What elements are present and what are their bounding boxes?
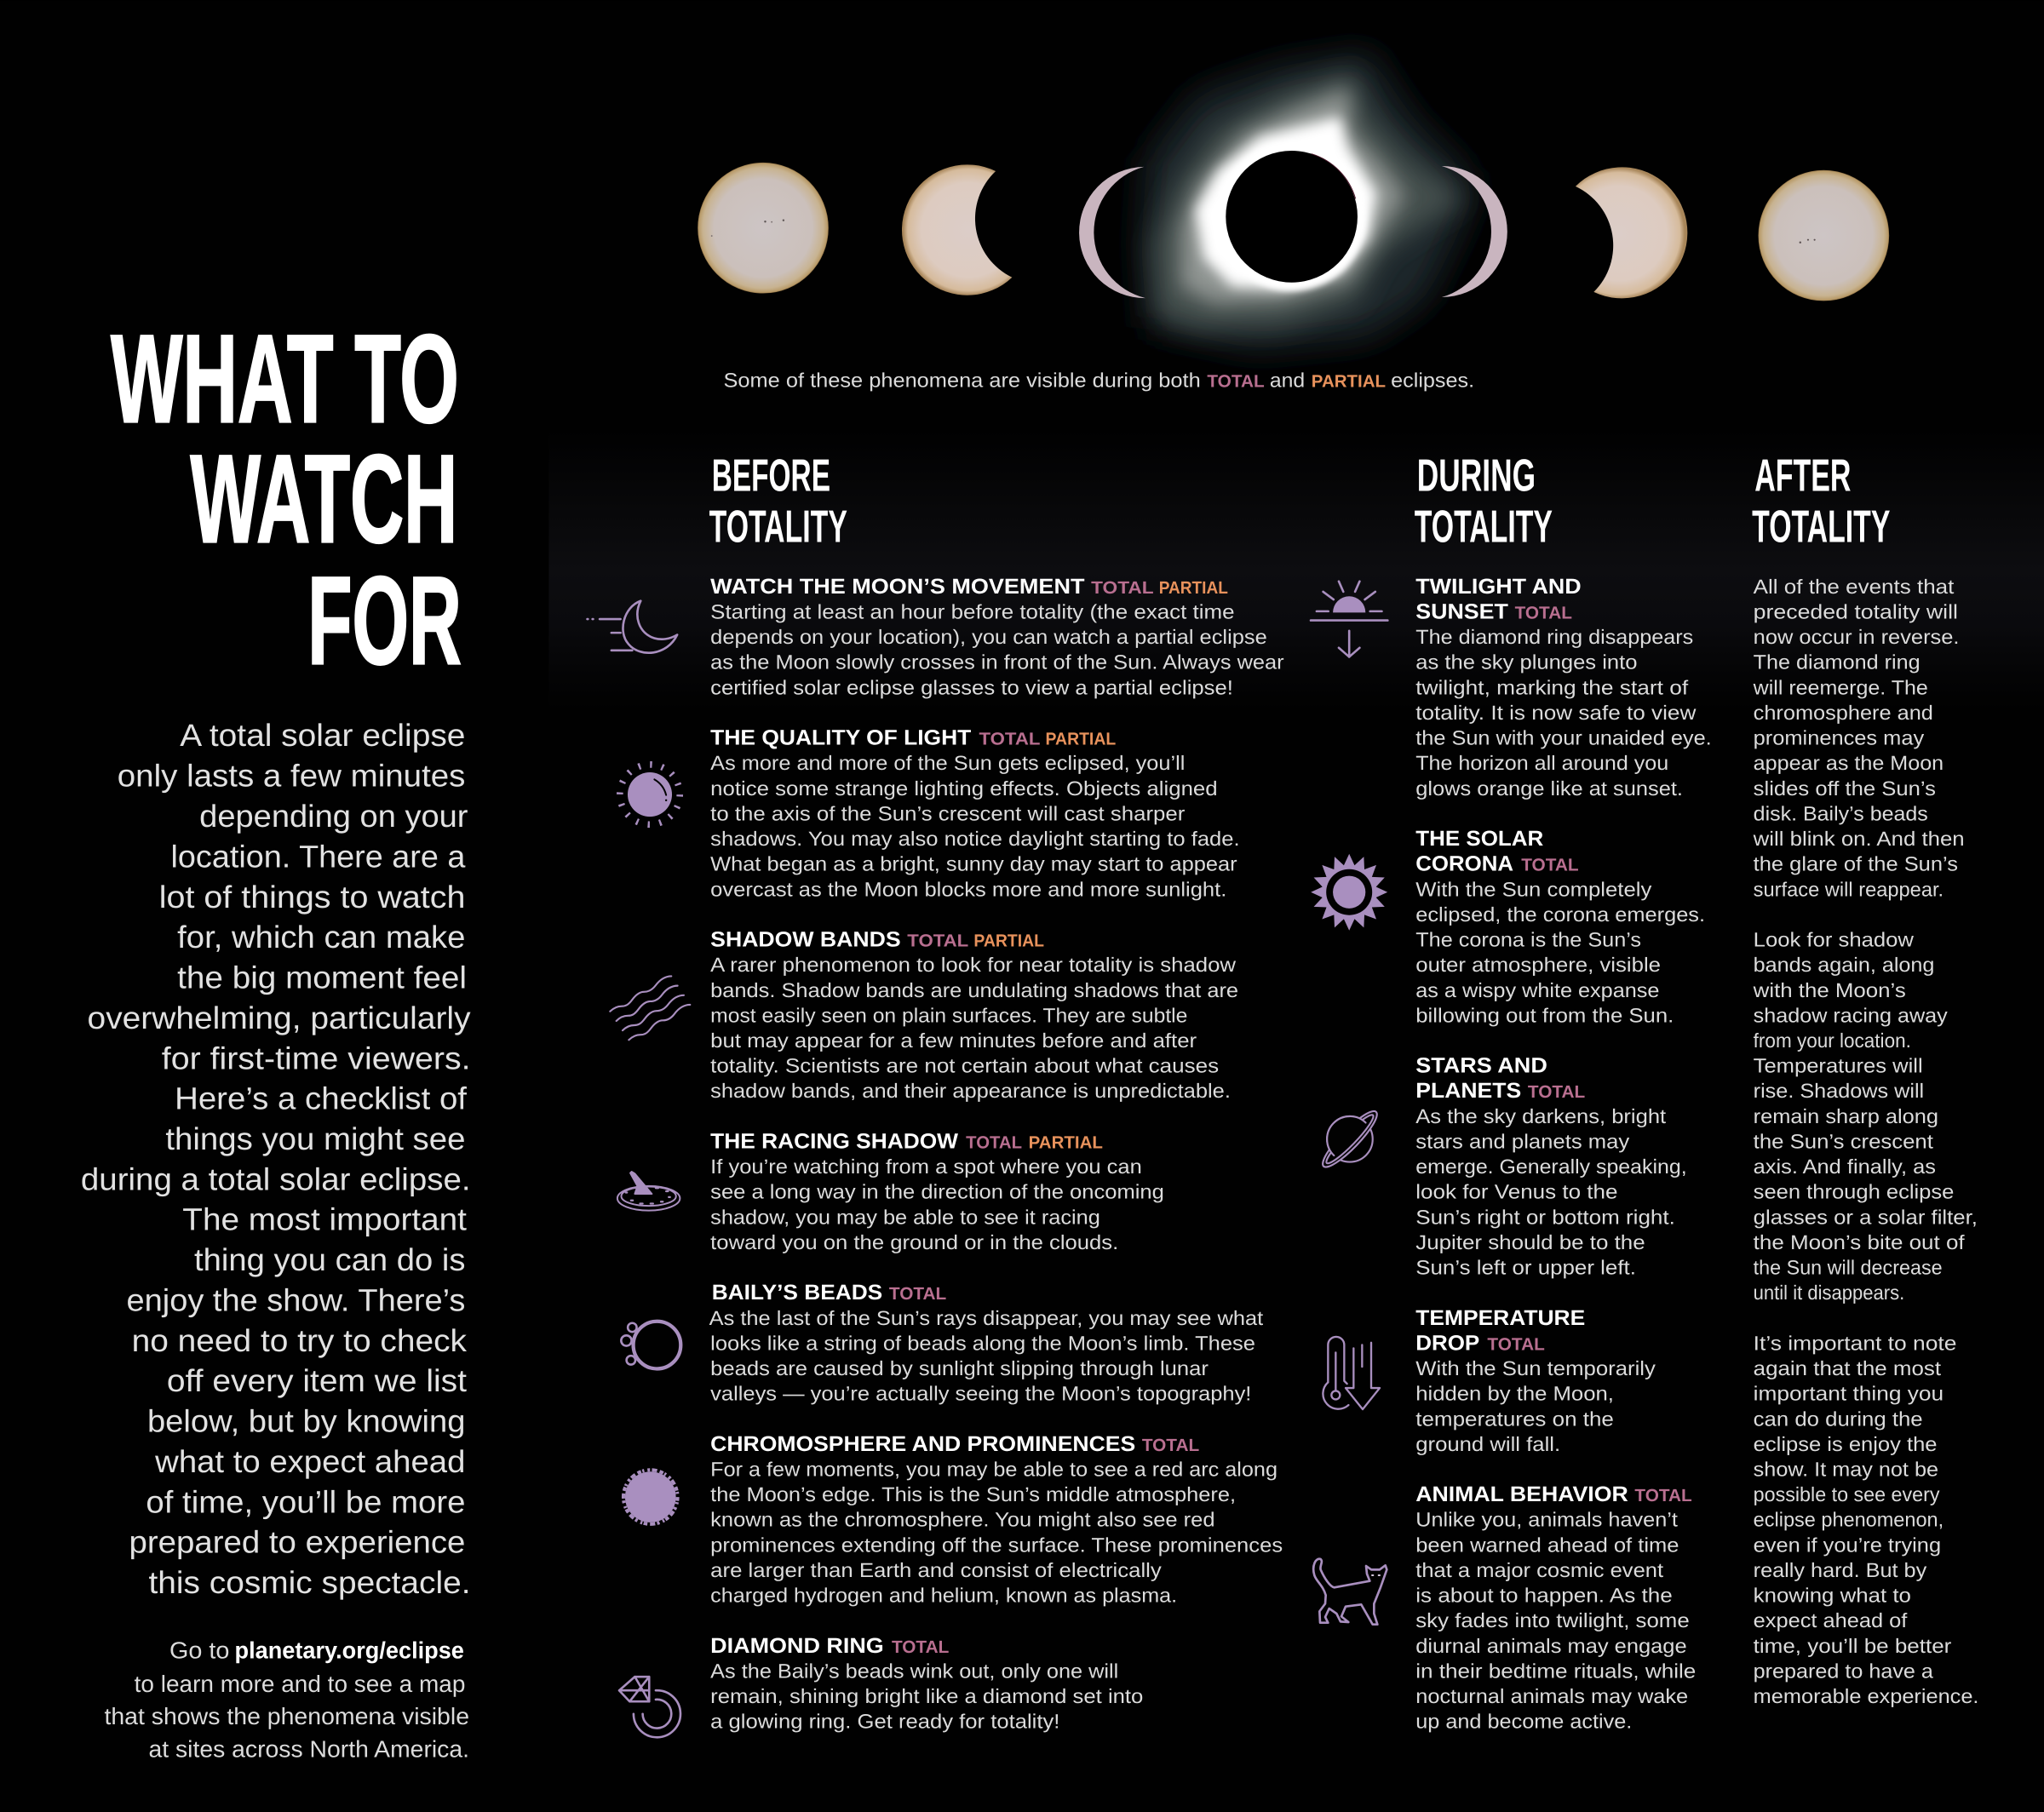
- item: stars and planets: TOTAL: [1528, 1082, 1585, 1102]
- item: animal behavior: TOTAL: [1634, 1486, 1692, 1505]
- item: baily's beads: TOTAL: [889, 1284, 946, 1304]
- item: animal behavior: that a major cosmic event: [1415, 1560, 1664, 1582]
- item: moon movement: TOTAL: [1091, 578, 1154, 597]
- item: animal behavior: [1313, 1483, 1696, 1734]
- intro caption: [723, 370, 1474, 393]
- call to action: planetary.org/eclipse: [235, 1637, 464, 1664]
- item: temperature drop: [1323, 1306, 1656, 1456]
- item: temperature drop: TEMPERATURE: [1415, 1306, 1585, 1330]
- heading: during totality: DURING: [1417, 450, 1536, 502]
- intro paragraph: lot of things to watch: [159, 880, 465, 915]
- item: solar corona: [1311, 828, 1705, 1028]
- intro paragraph: The most important: [182, 1203, 467, 1238]
- intro paragraph: location. There are a: [171, 840, 466, 875]
- item: baily's beads: valleys — you’re actually seeing the Moon’s topography!: [710, 1384, 1251, 1406]
- text: reverse events: now occur in reverse.: [1754, 627, 1960, 649]
- item: baily's beads: BAILY’S BEADS: [712, 1282, 882, 1305]
- intro paragraph: below, but by knowing: [147, 1405, 465, 1440]
- intro paragraph: thing you can do is: [194, 1243, 465, 1278]
- text: closing note: It’s important to note: [1754, 1333, 1956, 1356]
- item: quality of light: As more and more of the Sun gets eclipsed, you’ll: [710, 753, 1185, 775]
- text: shadow bands again: the Sun will decrease: [1754, 1258, 1943, 1280]
- item: twilight and sunset: twilight, marking the start of: [1415, 677, 1689, 699]
- intro paragraph: depending on your: [199, 800, 468, 834]
- text: reverse events: preceded totality will: [1754, 602, 1958, 624]
- item: twilight and sunset: The horizon all around you: [1415, 753, 1668, 775]
- item: quality of light: What began as a bright, sunny day may start to appear: [710, 854, 1237, 876]
- item: temperature drop: TOTAL: [1487, 1334, 1545, 1354]
- intro paragraph: [81, 719, 471, 1601]
- item: stars and planets: Sun’s right or bottom right.: [1415, 1207, 1675, 1229]
- item: baily's beads: As the last of the Sun’s rays disappear, you may see what: [709, 1308, 1264, 1330]
- item: twilight and sunset: SUNSET: [1415, 600, 1508, 624]
- item: racing shadow: shadow, you may be able to see it racing: [710, 1207, 1100, 1229]
- intro caption: TOTAL: [1207, 371, 1265, 391]
- sun: thin crescent right: [1442, 166, 1507, 297]
- intro caption: PARTIAL: [1312, 371, 1386, 391]
- item: moon movement: [588, 575, 1284, 699]
- item: solar corona: CORONA: [1415, 852, 1513, 876]
- item: chromosphere: are larger than Earth and consist of electrically: [710, 1560, 1162, 1582]
- item: chromosphere: the Moon’s edge. This is the Sun’s middle atmosphere,: [710, 1484, 1236, 1506]
- intro paragraph: off every item we list: [167, 1364, 467, 1399]
- icon: chromosphere: [623, 1470, 678, 1524]
- item: animal behavior: sky fades into twilight, some: [1415, 1610, 1690, 1632]
- heading: during totality: TOTALITY: [1415, 502, 1553, 553]
- text: reverse events: The diamond ring: [1754, 652, 1921, 674]
- item: moon movement: depends on your location), you can watch a partial eclipse: [710, 627, 1267, 649]
- intro paragraph: the big moment feel: [177, 960, 467, 996]
- text: reverse events: slides off the Sun’s: [1754, 778, 1936, 800]
- text: reverse events: appear as the Moon: [1754, 753, 1944, 775]
- text: reverse events: will reemerge. The: [1752, 677, 1928, 699]
- item: chromosphere: For a few moments, you may be able to see a red arc along: [710, 1459, 1278, 1482]
- text: shadow bands again: remain sharp along: [1754, 1106, 1938, 1128]
- item: shadow bands: most easily seen on plain surfaces. They are subtle: [710, 1006, 1187, 1028]
- title: [111, 310, 462, 691]
- item: stars and planets: look for Venus to the: [1415, 1182, 1617, 1204]
- item: stars and planets: STARS AND: [1415, 1054, 1547, 1078]
- icon: sunset: [1311, 582, 1387, 657]
- intro paragraph: overwhelming, particularly: [88, 1001, 471, 1036]
- text: closing note: knowing what to: [1754, 1586, 1911, 1608]
- text: shadow bands again: shadow racing away: [1754, 1006, 1948, 1028]
- item: twilight and sunset: [1311, 575, 1712, 800]
- eclipse sequence: [698, 51, 1889, 349]
- item: twilight and sunset: glows orange like at sunset.: [1415, 778, 1683, 800]
- item: diamond ring: TOTAL: [892, 1637, 949, 1656]
- item: stars and planets: PLANETS: [1415, 1080, 1521, 1103]
- item: shadow bands: SHADOW BANDS: [710, 928, 901, 952]
- text: closing note: really hard. But by: [1754, 1560, 1927, 1582]
- item: shadow bands: [610, 928, 1238, 1103]
- intro paragraph: what to expect ahead: [154, 1445, 465, 1480]
- text: shadow bands again: from your location.: [1754, 1030, 1911, 1052]
- item: stars and planets: Jupiter should be to the: [1415, 1232, 1645, 1254]
- intro paragraph: prepared to experience: [129, 1526, 465, 1561]
- intro paragraph: for first-time viewers.: [162, 1041, 471, 1076]
- text: reverse events: will blink on. And then: [1752, 829, 1965, 851]
- text: shadow bands again: axis. And finally, as: [1754, 1156, 1936, 1178]
- item: shadow bands: but may appear for a few minutes before and after: [710, 1030, 1197, 1052]
- item: moon movement: Starting at least an hour before totality (the exact time: [710, 602, 1234, 624]
- text: closing note: possible to see every: [1754, 1484, 1940, 1506]
- intro paragraph: only lasts a few minutes: [118, 759, 465, 794]
- item: racing shadow: PARTIAL: [1029, 1132, 1103, 1152]
- item: racing shadow: If you’re watching from a spot where you can: [710, 1156, 1142, 1178]
- item: solar corona: With the Sun completely: [1415, 879, 1652, 901]
- sun: thin crescent left: [1079, 167, 1145, 298]
- icon: beads ring: [621, 1322, 680, 1368]
- item: baily's beads: beads are caused by sunlight slipping through lunar: [710, 1358, 1209, 1380]
- text: shadow bands again: [1752, 930, 1978, 1305]
- item: animal behavior: been warned ahead of time: [1415, 1534, 1679, 1557]
- item: animal behavior: up and become active.: [1415, 1712, 1632, 1734]
- item: temperature drop: With the Sun temporarily: [1415, 1358, 1656, 1380]
- item: solar corona: outer atmosphere, visible: [1415, 955, 1661, 977]
- title: FOR: [307, 552, 462, 691]
- text: shadow bands again: with the Moon’s: [1752, 980, 1906, 1002]
- text: closing note: expect ahead of: [1754, 1610, 1908, 1632]
- item: diamond ring: DIAMOND RING: [710, 1634, 884, 1658]
- item: moon movement: WATCH THE MOON’S MOVEMENT: [710, 575, 1084, 599]
- column: before totality: [588, 450, 1284, 1737]
- text: reverse events: the glare of the Sun’s: [1754, 854, 1958, 876]
- item: racing shadow: toward you on the ground or in the clouds.: [710, 1232, 1118, 1254]
- item: quality of light: PARTIAL: [1046, 729, 1116, 748]
- heading: after totality: [1752, 450, 1890, 553]
- text: shadow bands again: rise. Shadows will: [1754, 1081, 1924, 1103]
- column: after totality: [1752, 450, 1978, 1708]
- item: twilight and sunset: The diamond ring disappears: [1415, 627, 1694, 649]
- item: baily's beads: looks like a string of beads along the Moon’s limb. These: [710, 1333, 1255, 1356]
- item: solar corona: The corona is the Sun’s: [1415, 930, 1642, 952]
- text: closing note: [1754, 1333, 1978, 1708]
- call to action: at sites across North America.: [148, 1736, 469, 1762]
- item: stars and planets: emerge. Generally speaking,: [1415, 1156, 1687, 1178]
- item: shadow bands: PARTIAL: [973, 931, 1044, 950]
- item: chromosphere: known as the chromosphere. You might also see red: [710, 1510, 1215, 1532]
- item: chromosphere: [623, 1432, 1283, 1608]
- text: shadow bands again: the Moon’s bite out of: [1754, 1232, 1966, 1254]
- item: stars and planets: stars and planets may: [1415, 1132, 1630, 1154]
- sun: partial crescent left: [902, 164, 1012, 295]
- icon: moon: [588, 601, 677, 653]
- sun: uneclipsed before: [698, 163, 829, 294]
- text: reverse events: disk. Baily’s beads: [1754, 804, 1928, 826]
- item: twilight and sunset: totality. It is now safe to view: [1415, 702, 1697, 725]
- intro caption: Some of these phenomena are visible during both: [723, 370, 1201, 393]
- item: animal behavior: diurnal animals may engage: [1415, 1636, 1687, 1658]
- item: moon movement: as the Moon slowly crosses in front of the Sun. Always wear: [710, 652, 1284, 674]
- item: quality of light: overcast as the Moon blocks more and more sunlight.: [710, 879, 1226, 901]
- item: animal behavior: nocturnal animals may wake: [1415, 1686, 1688, 1708]
- icon: sun: [620, 765, 680, 824]
- text: reverse events: prominences may: [1754, 728, 1925, 750]
- item: diamond ring: As the Baily’s beads wink out, only one will: [710, 1661, 1118, 1683]
- intro paragraph: things you might see: [165, 1122, 465, 1157]
- text: reverse events: surface will reappear.: [1754, 879, 1944, 901]
- item: chromosphere: prominences extending off the surface. These prominences: [710, 1534, 1283, 1557]
- corona: [1141, 51, 1473, 349]
- title: WHAT TO: [111, 310, 459, 450]
- icon: corona star: [1311, 854, 1387, 931]
- intro paragraph: A total solar eclipse: [180, 719, 465, 754]
- item: diamond ring: a glowing ring. Get ready for totality!: [710, 1712, 1059, 1734]
- item: twilight and sunset: as the sky plunges into: [1415, 652, 1637, 674]
- text: reverse events: All of the events that: [1754, 576, 1955, 599]
- item: moon movement: certified solar eclipse glasses to view a partial eclipse!: [710, 677, 1233, 699]
- intro paragraph: Here’s a checklist of: [175, 1082, 467, 1117]
- text: closing note: even if you’re trying: [1754, 1534, 1941, 1557]
- item: quality of light: [620, 726, 1240, 901]
- text: shadow bands again: seen through eclipse: [1754, 1182, 1954, 1204]
- item: shadow bands: TOTAL: [907, 931, 968, 950]
- text: closing note: eclipse is enjoy the: [1754, 1434, 1937, 1456]
- intro paragraph: enjoy the show. There’s: [126, 1283, 465, 1319]
- icon: thermometer: [1323, 1337, 1380, 1409]
- icon: diamond ring: [619, 1677, 680, 1737]
- icon: sundial: [617, 1172, 680, 1211]
- call to action: Go to: [169, 1637, 229, 1664]
- item: chromosphere: charged hydrogen and helium, known as plasma.: [710, 1586, 1177, 1608]
- text: closing note: again that the most: [1754, 1358, 1942, 1380]
- text: closing note: memorable experience.: [1754, 1686, 1978, 1708]
- item: quality of light: shadows. You may also notice daylight starting to fade.: [710, 829, 1240, 851]
- background band: [548, 430, 2044, 710]
- item: chromosphere: CHROMOSPHERE AND PROMINENCES: [710, 1432, 1135, 1456]
- sun: uneclipsed after: [1758, 170, 1889, 301]
- column: during totality: [1307, 450, 1712, 1734]
- text: reverse events: chromosphere and: [1754, 702, 1933, 725]
- heading: before totality: TOTALITY: [709, 502, 847, 553]
- text: shadow bands again: until it disappears.: [1754, 1282, 1904, 1305]
- text: closing note: prepared to have a: [1754, 1661, 1934, 1683]
- icon: waves: [610, 976, 690, 1040]
- item: racing shadow: [617, 1130, 1164, 1254]
- intro caption: and: [1270, 370, 1305, 393]
- item: animal behavior: ANIMAL BEHAVIOR: [1415, 1483, 1628, 1506]
- item: diamond ring: remain, shining bright like a diamond set into: [710, 1686, 1143, 1708]
- item: quality of light: THE QUALITY OF LIGHT: [710, 726, 971, 750]
- item: diamond ring: [619, 1634, 1143, 1737]
- heading: after totality: AFTER: [1754, 450, 1851, 502]
- item: temperature drop: temperatures on the: [1415, 1408, 1614, 1431]
- item: stars and planets: As the sky darkens, bright: [1415, 1106, 1667, 1128]
- item: moon movement: PARTIAL: [1159, 578, 1228, 597]
- intro paragraph: for, which can make: [177, 920, 465, 955]
- text: closing note: can do during the: [1754, 1408, 1923, 1431]
- item: solar corona: as a wispy white expanse: [1415, 980, 1659, 1002]
- call to action: to learn more and to see a map: [135, 1671, 465, 1697]
- item: racing shadow: THE RACING SHADOW: [710, 1130, 959, 1154]
- heading: before totality: [709, 450, 847, 553]
- icon: cat: [1313, 1559, 1387, 1625]
- item: solar corona: eclipsed, the corona emerges.: [1415, 904, 1705, 926]
- call to action: [104, 1637, 469, 1762]
- heading: before totality: BEFORE: [712, 450, 830, 502]
- item: animal behavior: Unlike you, animals haven’t: [1415, 1510, 1679, 1532]
- intro paragraph: no need to try to check: [132, 1324, 468, 1359]
- item: shadow bands: bands. Shadow bands are undulating shadows that are: [710, 980, 1238, 1002]
- text: closing note: important thing you: [1754, 1384, 1944, 1406]
- item: solar corona: billowing out from the Sun.: [1415, 1006, 1674, 1028]
- item: animal behavior: in their bedtime rituals, while: [1415, 1661, 1696, 1683]
- item: racing shadow: TOTAL: [966, 1132, 1022, 1152]
- intro paragraph: this cosmic spectacle.: [148, 1566, 471, 1601]
- item: solar corona: THE SOLAR: [1415, 828, 1544, 851]
- text: shadow bands again: bands again, along: [1754, 955, 1934, 977]
- item: twilight and sunset: TWILIGHT AND: [1415, 575, 1582, 599]
- item: quality of light: notice some strange lighting effects. Objects aligned: [710, 778, 1218, 800]
- item: stars and planets: [1307, 1054, 1687, 1280]
- text: closing note: eclipse phenomenon,: [1754, 1510, 1944, 1532]
- item: shadow bands: totality. Scientists are not certain about what causes: [710, 1056, 1220, 1078]
- item: chromosphere: TOTAL: [1142, 1436, 1199, 1454]
- item: racing shadow: see a long way in the direction of the oncoming: [710, 1182, 1164, 1204]
- text: shadow bands again: Look for shadow: [1754, 930, 1915, 952]
- text: reverse events: [1752, 576, 1965, 901]
- intro paragraph: during a total solar eclipse.: [81, 1162, 471, 1198]
- intro caption: eclipses.: [1391, 370, 1474, 393]
- item: solar corona: TOTAL: [1521, 855, 1579, 874]
- sun: partial crescent right: [1576, 167, 1687, 298]
- item: baily's beads: [621, 1282, 1264, 1406]
- item: quality of light: to the axis of the Sun’s crescent will cast sharper: [710, 804, 1185, 826]
- icon: saturn: [1307, 1096, 1382, 1173]
- item: temperature drop: DROP: [1415, 1332, 1479, 1356]
- title: WATCH: [190, 430, 457, 570]
- heading: during totality: [1415, 450, 1553, 553]
- item: temperature drop: hidden by the Moon,: [1415, 1384, 1614, 1406]
- item: temperature drop: ground will fall.: [1415, 1434, 1560, 1456]
- item: twilight and sunset: the Sun with your unaided eye.: [1415, 728, 1712, 750]
- intro paragraph: of time, you’ll be more: [146, 1485, 465, 1521]
- item: animal behavior: is about to happen. As the: [1415, 1586, 1673, 1608]
- text: shadow bands again: glasses or a solar filter,: [1754, 1207, 1978, 1229]
- item: shadow bands: shadow bands, and their appearance is unpredictable.: [710, 1081, 1231, 1103]
- call to action: that shows the phenomena visible: [104, 1704, 469, 1729]
- item: stars and planets: Sun’s left or upper left.: [1415, 1258, 1636, 1280]
- text: closing note: time, you’ll be better: [1754, 1636, 1951, 1658]
- item: twilight and sunset: TOTAL: [1515, 603, 1572, 622]
- item: shadow bands: A rarer phenomenon to look for near totality is shadow: [710, 955, 1237, 977]
- text: shadow bands again: Temperatures will: [1754, 1056, 1923, 1078]
- text: closing note: show. It may not be: [1754, 1459, 1938, 1482]
- item: quality of light: TOTAL: [979, 729, 1040, 748]
- heading: after totality: TOTALITY: [1752, 502, 1890, 553]
- text: shadow bands again: the Sun’s crescent: [1754, 1132, 1934, 1154]
